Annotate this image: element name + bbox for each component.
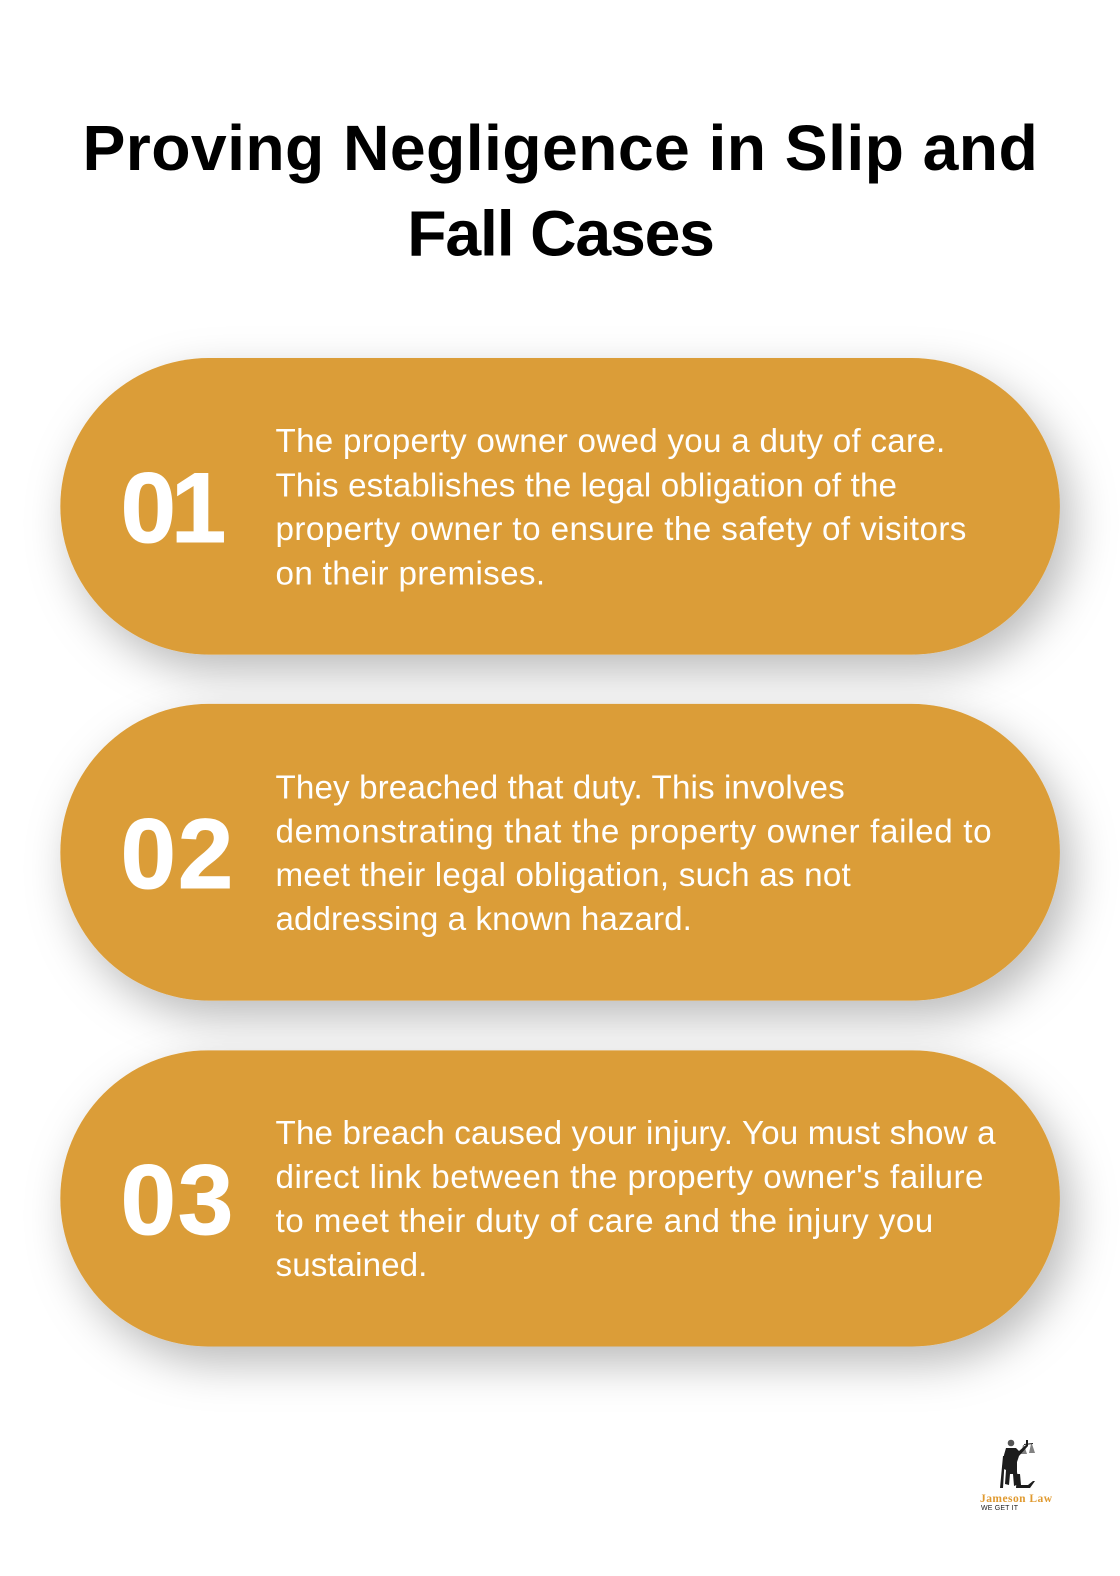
- step 03 text: The breach caused your injury. You must show a: [276, 1115, 996, 1152]
- step 01 text: on their premises.: [276, 555, 545, 592]
- panel: step 02: [60, 704, 1060, 1001]
- icon: lady justice: [1000, 1440, 1035, 1488]
- step 01 text: [276, 423, 966, 592]
- step 01 text: The property owner owed you a duty of care.: [276, 423, 945, 460]
- logo name: Jameson Law: [980, 1493, 1053, 1505]
- step 02 text: addressing a known hazard.: [276, 901, 692, 938]
- title: [82, 112, 1038, 269]
- step 02 text: [276, 769, 992, 938]
- step 02 text: meet their legal obligation, such as not: [276, 857, 851, 894]
- logo tagline: WE GET IT: [981, 1505, 1019, 1512]
- step 03 text: sustained.: [276, 1247, 427, 1284]
- panel: step 03: [60, 1050, 1060, 1346]
- step 01 number: 01: [121, 453, 226, 564]
- title: Fall Cases: [407, 197, 715, 269]
- panel: step 01: [60, 358, 1060, 655]
- step 01 text: This establishes the legal obligation of the: [276, 467, 897, 504]
- logo: Jameson Law: [980, 1440, 1053, 1512]
- title: Proving Negligence in Slip and: [82, 112, 1038, 184]
- step 03 text: [276, 1115, 996, 1284]
- step 03 number: 03: [121, 1145, 233, 1256]
- step 02 number: 02: [121, 799, 233, 910]
- step 02 text: They breached that duty. This involves: [276, 769, 845, 806]
- step 02 text: demonstrating that the property owner failed to: [276, 814, 992, 851]
- step 03 text: to meet their duty of care and the injury you: [276, 1203, 933, 1240]
- step 01 text: property owner to ensure the safety of visitors: [276, 511, 966, 548]
- step 03 text: direct link between the property owner's failure: [276, 1159, 983, 1196]
